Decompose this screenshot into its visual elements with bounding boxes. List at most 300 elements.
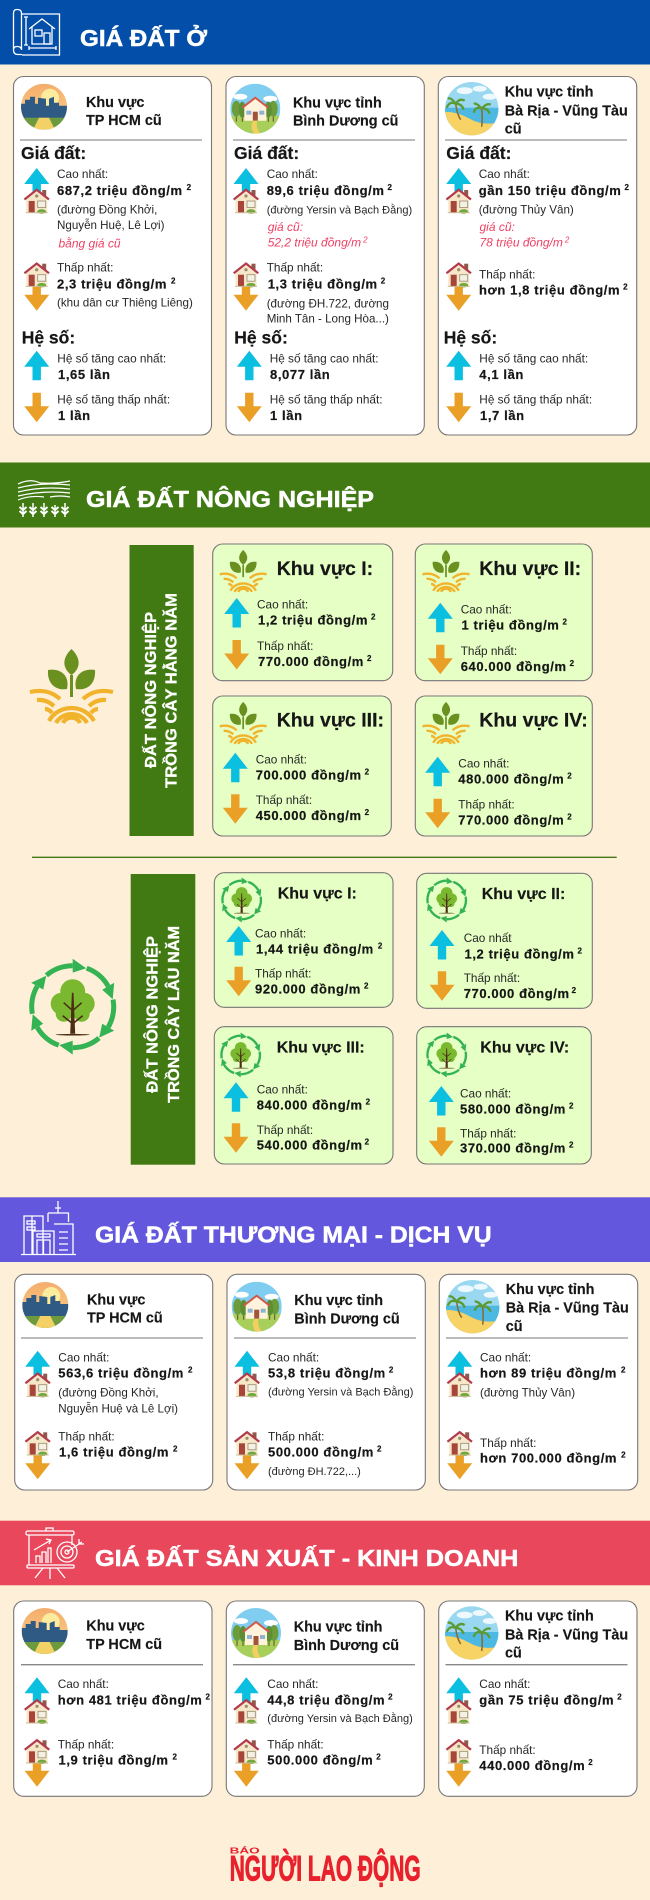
icon: tree with cycle arrows (19, 952, 127, 1062)
icon: arrow up with house (234, 1677, 259, 1724)
region name: TP HCM cũ (86, 1637, 162, 1653)
highest price: 52,2 triệu đồng/m (268, 236, 361, 250)
highest price: Cao nhất: (267, 1677, 318, 1691)
lowest price: 1,6 triệu đồng/m (59, 1445, 169, 1460)
lowest price (480, 1436, 626, 1466)
icon: arrow up (224, 598, 249, 628)
lowest price: 500.000 đồng/m (268, 1445, 374, 1460)
area title: Khu vực III: (277, 1039, 365, 1056)
lowest price: 540.000 đồng/m (257, 1137, 363, 1152)
icon: arrow up with house (234, 168, 258, 214)
bar text line 1: ĐẤT NÔNG NGHIỆP (141, 612, 160, 768)
lowest price: Thấp nhất: (57, 261, 113, 275)
region name: Khu vực tỉnh (506, 1282, 594, 1298)
highest price: Cao nhất: (57, 167, 108, 181)
icon: house with arrow down (446, 1740, 471, 1787)
lowest price: 770.000 đồng/m (464, 986, 570, 1001)
lowest price: 2 (570, 659, 575, 668)
card: perennial crops, area III (214, 1027, 393, 1164)
lowest price: Thấp nhất: (480, 1436, 536, 1450)
lowest price (461, 644, 575, 674)
highest price: 1,2 triệu đồng/m (464, 946, 575, 961)
highest price (461, 602, 568, 632)
highest price: 2 (389, 1366, 394, 1375)
icon: country house (230, 84, 280, 134)
region name: Khu vực tỉnh (505, 85, 593, 101)
bar text line 1: ĐẤT NÔNG NGHIỆP (142, 936, 161, 1093)
icon: farm fields (18, 481, 70, 517)
icon: arrow up (24, 351, 49, 380)
icon: arrow down (446, 393, 471, 422)
lowest price: Thấp nhất: (268, 1430, 324, 1444)
highest price: 2 (388, 1692, 393, 1701)
card: Ba Ria - Vung Tau, residential (438, 76, 637, 435)
logo: Báo Người Lao Động: NGƯỜI LAO ĐỘNG (230, 1849, 421, 1889)
icon: house with arrow down (446, 264, 471, 311)
region name: Khu vực tỉnh (294, 1620, 382, 1636)
card: perennial crops, area IV (417, 1027, 591, 1164)
title: GIÁ ĐẤT SẢN XUẤT - KINH DOANH (95, 1543, 518, 1571)
highest price: 2 (617, 1692, 622, 1701)
highest price: 840.000 đồng/m (257, 1097, 363, 1112)
highest price: Cao nhất: (58, 1350, 109, 1364)
icon: beach (445, 82, 499, 136)
icon: arrow up with house (447, 1351, 472, 1397)
highest price: 89,6 triệu đồng/m (267, 183, 385, 198)
lowest price: (khu dân cư Thiêng Liêng) (57, 297, 193, 310)
highest price: 687,2 triệu đồng/m (57, 183, 183, 198)
lowest price (479, 267, 628, 298)
card: perennial crops, area II (417, 873, 592, 1008)
highest price: 2 (362, 236, 368, 245)
card: perennial crops, area I (214, 873, 393, 1007)
icon: arrow up (237, 351, 262, 380)
icon: beach (446, 1280, 500, 1334)
card: Binh Duong, production (226, 1601, 424, 1796)
lowest price: 2 (623, 283, 628, 292)
highest price: 700.000 đồng/m (256, 767, 362, 782)
highest price: (đường Thủy Vân) (479, 203, 574, 216)
section header: agricultural land (0, 462, 650, 528)
highest price: 1,2 triệu đồng/m (258, 613, 368, 628)
lowest price: Thấp nhất: (255, 967, 311, 981)
lowest price: hơn 1,8 triệu đồng/m (479, 283, 620, 298)
lowest price (479, 1743, 593, 1773)
icon: arrow down (430, 971, 454, 1001)
lowest price: hơn 700.000 đồng/m (480, 1451, 617, 1466)
highest price (257, 1082, 371, 1112)
lowest price: 2 (621, 1451, 626, 1460)
lowest price: 2,3 triệu đồng/m (57, 276, 167, 291)
highest price: giá cũ: (268, 220, 303, 234)
icon: arrow down (429, 1127, 454, 1157)
highest price: Nguyễn Huệ, Lê Lợi) (57, 219, 165, 232)
card: annual crops, area IV (415, 696, 592, 836)
lowest price (268, 1430, 382, 1478)
region name: Bà Rịa - Vũng Tàu (506, 1301, 629, 1317)
title: GIÁ ĐẤT THƯƠNG MẠI - DỊCH VỤ (95, 1220, 492, 1247)
highest price: (đường Đồng Khởi, (57, 203, 157, 216)
lowest price: 2 (367, 654, 372, 663)
icon: house with arrow down (234, 1740, 259, 1787)
lowest price: 2 (567, 812, 572, 821)
card: TP HCM, commercial (15, 1274, 213, 1490)
lowest price (255, 967, 369, 996)
highest price: 2 (371, 613, 376, 622)
area title: Khu vực I: (277, 558, 373, 580)
icon: presentation board with target (26, 1528, 84, 1579)
heading: land price: Giá đất: (234, 143, 299, 163)
highest price: Cao nhất: (480, 1350, 531, 1364)
icon: arrow down (223, 794, 248, 824)
lowest price: Thấp nhất: (267, 261, 323, 275)
highest price: Nguyễn Huệ và Lê Lợi) (58, 1402, 178, 1415)
icon: office buildings (21, 1201, 76, 1254)
bar text line 2: TRỒNG CÂY LÂU NĂM (164, 926, 183, 1103)
lowest price: 770.000 đồng/m (458, 812, 564, 827)
card: annual crops, area II (415, 544, 592, 681)
highest price: 2 (365, 767, 370, 776)
highest price: 78 triệu đồng/m (480, 236, 563, 250)
lowest price: 2 (365, 1137, 370, 1146)
highest price (255, 926, 383, 956)
region name: cũ (505, 1646, 522, 1662)
lowest price: 2 (171, 276, 176, 285)
icon: tree (421, 1029, 472, 1081)
title: GIÁ ĐẤT NÔNG NGHIỆP (86, 485, 374, 512)
lowest price (256, 793, 370, 823)
highest price (464, 931, 583, 961)
lowest price: 770.000 đồng/m (258, 654, 364, 669)
highest coefficient: Hệ số tăng cao nhất: (479, 352, 588, 366)
highest price (57, 167, 192, 250)
highest price: 480.000 đồng/m (458, 771, 564, 786)
region name: TP HCM cũ (87, 1310, 163, 1326)
region name: Khu vực tỉnh (293, 95, 382, 111)
area title: Khu vực I: (278, 885, 357, 902)
region name: Bình Dương cũ (294, 1311, 400, 1327)
icon: sprout (220, 702, 267, 744)
area title: Khu vực IV: (479, 710, 588, 732)
region name: Khu vực tỉnh (505, 1609, 594, 1625)
lowest price: (đường ĐH.722, đường (267, 297, 389, 310)
bar text line 2: TRỒNG CÂY HẰNG NĂM (162, 593, 181, 788)
lowest coefficient (57, 392, 170, 423)
heading: coefficient: Hệ số: (444, 327, 497, 347)
icon: house with arrow down (24, 1740, 50, 1787)
lowest coefficient: 1 lần (58, 408, 91, 423)
region name: Khu vực (86, 95, 144, 111)
lowest price: 2 (381, 276, 386, 285)
icon: tree (215, 1029, 266, 1081)
icon: beach (445, 1606, 499, 1660)
section header: production and business land (0, 1521, 650, 1585)
highest price: bằng giá cũ (58, 235, 121, 250)
highest price (256, 752, 370, 782)
highest price (267, 1677, 413, 1725)
lowest price (460, 1126, 574, 1156)
highest price: gần 75 triệu đồng/m (479, 1692, 614, 1707)
lowest price: 2 (569, 1141, 574, 1150)
icon: arrow up (429, 1086, 454, 1116)
lowest price: Thấp nhất: (257, 1123, 313, 1137)
icon: city (22, 1608, 68, 1654)
region name: Bà Rịa - Vũng Tàu (505, 103, 628, 119)
icon: arrow down (224, 640, 249, 670)
icon: arrow up with house (446, 168, 471, 214)
heading: coefficient: Hệ số: (234, 327, 288, 347)
region name: Khu vực (87, 1292, 145, 1308)
highest coefficient: Hệ số tăng cao nhất: (270, 352, 379, 366)
highest price: Cao nhất: (479, 167, 530, 181)
icon: sprout (220, 550, 267, 592)
lowest price: (đường ĐH.722,...) (268, 1466, 361, 1478)
highest price: (đường Yersin và Bạch Đằng) (267, 1712, 413, 1725)
lowest price: Thấp nhất: (257, 639, 313, 653)
lowest price: Thấp nhất: (256, 793, 312, 807)
highest price: 2 (624, 183, 630, 192)
highest coefficient: Hệ số tăng cao nhất: (57, 352, 166, 366)
icon: arrow up with house (24, 1677, 50, 1724)
logo: Báo Người Lao Động: BÁO (230, 1845, 260, 1855)
highest coefficient: 1,65 lần (58, 367, 110, 382)
highest price: giá cũ: (480, 220, 515, 234)
highest price: Cao nhất: (267, 167, 318, 181)
region name: Bình Dương cũ (293, 114, 398, 130)
highest price: Cao nhất: (257, 1082, 308, 1096)
icon: arrow up (428, 603, 453, 632)
lowest price (267, 1737, 381, 1767)
highest price (479, 167, 630, 250)
lowest price (257, 639, 372, 669)
highest price (58, 1350, 193, 1415)
icon: arrow down (425, 799, 450, 828)
lowest price: Thấp nhất: (464, 971, 520, 985)
heading: coefficient: Hệ số: (22, 327, 75, 347)
lowest price: 920.000 đồng/m (255, 981, 361, 996)
logo: Báo Người Lao Động (230, 1845, 421, 1889)
region name: Bình Dương cũ (294, 1638, 399, 1654)
icon: house with arrow down (24, 264, 49, 311)
lowest price: 2 (572, 986, 577, 995)
region name: Khu vực (86, 1619, 145, 1635)
highest coefficient (479, 352, 588, 382)
highest price: Cao nhất: (255, 926, 306, 940)
highest price: 2 (205, 1692, 211, 1701)
highest price: 1,44 triệu đồng/m (256, 941, 374, 956)
lowest price: Thấp nhất: (58, 1737, 114, 1751)
highest price: (đường Thủy Vân) (480, 1386, 575, 1399)
section header: commercial and service land (0, 1197, 650, 1262)
lowest price: Thấp nhất: (58, 1430, 115, 1444)
highest price: gần 150 triệu đồng/m (479, 183, 621, 198)
label bar: perennial crops (131, 874, 195, 1165)
icon: sprout (422, 702, 469, 744)
card: annual crops, area III (213, 696, 391, 836)
card: Ba Ria - Vung Tau, production (439, 1601, 637, 1796)
lowest price: 370.000 đồng/m (460, 1141, 566, 1156)
highest coefficient (270, 352, 379, 382)
icon: house with arrow down (25, 1432, 50, 1479)
icon: arrow up with house (25, 1351, 50, 1397)
heading: land price: Giá đất: (446, 143, 511, 163)
card: Ba Ria - Vung Tau, commercial (439, 1274, 638, 1490)
lowest price: Thấp nhất: (460, 1126, 516, 1140)
highest price (460, 1087, 574, 1116)
lowest price: 450.000 đồng/m (256, 808, 362, 823)
section header: residential land (0, 0, 650, 64)
icon: sprout on field (30, 649, 113, 723)
highest price: 2 (621, 1366, 626, 1375)
region name: Khu vực tỉnh (294, 1293, 383, 1309)
icon: arrow up (226, 926, 251, 956)
highest price: 2 (569, 1101, 574, 1110)
lowest price: 2 (173, 1445, 178, 1454)
lowest price: 2 (377, 1445, 382, 1454)
lowest price: 640.000 đồng/m (461, 659, 567, 674)
highest price: (đường Yersin và Bạch Đằng) (268, 1386, 413, 1399)
icon: tree (216, 874, 267, 926)
highest price: 2 (378, 941, 383, 950)
label bar: annual crops (130, 545, 194, 836)
icon: arrow up with house (234, 1351, 260, 1397)
highest price: Cao nhất: (256, 752, 307, 766)
lowest price: 1,3 triệu đồng/m (268, 276, 378, 291)
highest coefficient: 4,1 lần (479, 367, 524, 382)
highest price: 53,8 triệu đồng/m (268, 1366, 386, 1381)
card: Binh Duong, commercial (227, 1274, 425, 1490)
region name: cũ (505, 121, 521, 137)
lowest price: 500.000 đồng/m (267, 1752, 373, 1767)
icon: arrow down (226, 967, 251, 996)
icon: house blueprint (14, 10, 60, 55)
lowest coefficient: Hệ số tăng thấp nhất: (479, 392, 592, 406)
heading: land price: Giá đất: (21, 143, 86, 163)
highest price: 44,8 triệu đồng/m (267, 1692, 385, 1707)
lowest price (458, 797, 572, 827)
highest price (480, 1350, 626, 1399)
lowest price: 2 (365, 808, 370, 817)
icon: country house (231, 1608, 281, 1658)
lowest price: Minh Tân - Long Hòa...) (267, 312, 389, 325)
lowest price: 2 (588, 1758, 593, 1767)
icon: arrow down (24, 393, 49, 422)
highest price: 1 triệu đồng/m (462, 617, 559, 632)
region name: TP HCM cũ (86, 113, 162, 129)
highest price (458, 756, 572, 786)
highest price: 580.000 đồng/m (460, 1101, 566, 1116)
lowest price: 1,9 triệu đồng/m (58, 1752, 169, 1767)
lowest price (58, 1737, 178, 1767)
lowest price: 2 (173, 1752, 178, 1761)
icon: arrow up (430, 930, 454, 960)
highest price: Cao nhất: (479, 1677, 530, 1691)
highest price: 563,6 triệu đồng/m (58, 1366, 184, 1381)
lowest coefficient: 1,7 lần (480, 408, 525, 423)
region name: cũ (506, 1319, 522, 1335)
highest price (479, 1677, 622, 1707)
lowest price: 2 (364, 981, 369, 990)
lowest price (58, 1430, 178, 1460)
highest coefficient (57, 352, 166, 382)
lowest price (464, 971, 577, 1001)
area title: Khu vực II: (482, 886, 565, 903)
icon: arrow up (425, 757, 450, 786)
highest price: Cao nhất: (58, 1677, 109, 1691)
lowest price: Thấp nhất: (458, 797, 515, 811)
highest price (268, 1350, 413, 1399)
icon: arrow down (237, 393, 262, 422)
highest price: (đường Đồng Khởi, (58, 1386, 159, 1399)
highest price (257, 598, 376, 628)
icon: city (21, 84, 67, 130)
icon: arrow up (446, 351, 471, 380)
highest coefficient: 8,077 lần (270, 367, 330, 382)
card: TP HCM, production (14, 1601, 212, 1796)
highest price: 2 (366, 1097, 371, 1106)
icon: arrow up with house (24, 168, 49, 214)
icon: arrow down (224, 1123, 248, 1153)
icon: arrow up with house (446, 1677, 471, 1724)
card: annual crops, area I (213, 544, 393, 681)
lowest price (267, 261, 389, 325)
lowest coefficient (479, 392, 592, 423)
icon: arrow up (223, 753, 248, 782)
highest price: Cao nhất (464, 931, 512, 945)
highest price: (đường Yersin và Bạch Đằng) (267, 203, 412, 216)
lowest price: Thấp nhất: (267, 1737, 324, 1751)
lowest coefficient: Hệ số tăng thấp nhất: (57, 392, 170, 406)
icon: sprout (422, 550, 469, 592)
icon: house with arrow down (234, 264, 258, 311)
icon: tree (421, 874, 472, 926)
highest price: hơn 481 triệu đồng/m (58, 1692, 202, 1707)
lowest price: Thấp nhất: (461, 644, 517, 658)
icon: arrow up (224, 1082, 248, 1112)
highest price: Cao nhất: (257, 598, 308, 612)
icon: house with arrow down (234, 1432, 260, 1479)
highest price: hơn 89 triệu đồng/m (480, 1366, 617, 1381)
lowest coefficient: Hệ số tăng thấp nhất: (270, 392, 383, 406)
highest price: 2 (564, 236, 570, 245)
highest price (58, 1677, 211, 1707)
highest price: Cao nhất: (268, 1350, 319, 1364)
highest price: 2 (188, 1366, 193, 1375)
highest price: Cao nhất: (460, 1087, 511, 1101)
title: GIÁ ĐẤT Ở (80, 23, 207, 51)
highest price: 2 (187, 183, 192, 192)
area title: Khu vực IV: (480, 1039, 569, 1056)
region name: Bà Rịa - Vũng Tàu (505, 1627, 628, 1643)
lowest price: Thấp nhất: (479, 1743, 536, 1757)
highest price: 2 (388, 183, 393, 192)
card: TP HCM, residential (14, 76, 212, 435)
card: Binh Duong, residential (226, 76, 424, 435)
highest price: 2 (562, 617, 568, 626)
lowest coefficient: 1 lần (270, 408, 303, 423)
highest price (267, 167, 412, 250)
lowest price (57, 261, 193, 310)
area title: Khu vực III: (277, 710, 384, 732)
lowest price: 2 (376, 1752, 381, 1761)
highest price: Cao nhất: (458, 756, 509, 770)
highest price: 2 (567, 771, 572, 780)
icon: house with arrow down (447, 1432, 472, 1479)
highest price: 2 (578, 946, 583, 955)
lowest price: 440.000 đồng/m (479, 1758, 585, 1773)
lowest coefficient (270, 392, 383, 423)
lowest price (257, 1123, 370, 1152)
